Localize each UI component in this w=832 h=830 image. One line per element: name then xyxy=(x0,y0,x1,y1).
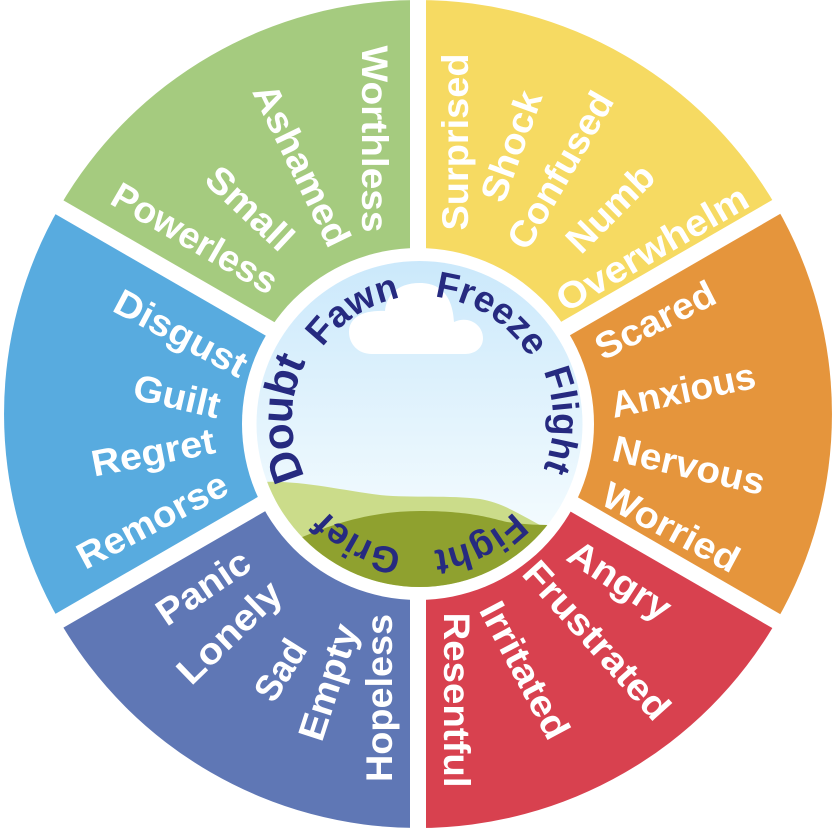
orange sector words: Anxious xyxy=(607,355,759,426)
center white ring xyxy=(242,248,594,600)
orange sector words: Worried xyxy=(595,474,747,581)
indigo sector words: Hopeless xyxy=(359,614,400,782)
sector: red xyxy=(418,414,776,828)
center scene: sky, cloud and hills xyxy=(250,255,590,600)
red sector words: Irritated xyxy=(471,594,578,746)
blue sector words: Regret xyxy=(88,420,218,484)
green sector words: Ashamed xyxy=(245,77,359,253)
center curved labels xyxy=(263,272,580,574)
green sector words: Small xyxy=(197,158,302,259)
indigo sector words: Panic xyxy=(148,541,258,634)
indigo sector words xyxy=(148,541,400,782)
green sector words: Worthless xyxy=(354,46,395,232)
yellow sector words: Shock xyxy=(472,85,550,207)
sector: blue xyxy=(4,207,418,621)
sector: indigo xyxy=(60,414,418,828)
red sector words: Resentful xyxy=(436,612,477,788)
label: Fight: Fight xyxy=(434,514,529,574)
cloud xyxy=(349,283,483,354)
blue sector words: Guilt xyxy=(129,367,224,426)
blue sector words: Remorse xyxy=(70,464,235,577)
indigo sector words: Lonely xyxy=(168,572,291,692)
red sector words xyxy=(436,532,680,788)
yellow sector words: Overwhelm xyxy=(549,177,756,320)
green sector words: Powerless xyxy=(104,174,285,302)
indigo sector words: Empty xyxy=(290,618,367,746)
label: Grief: Grief xyxy=(308,514,398,573)
orange sector words: Nervous xyxy=(609,428,769,503)
orange sector words xyxy=(588,273,769,581)
orange sector words: Scared xyxy=(588,273,722,368)
red sector words: Frustrated xyxy=(515,552,679,728)
light green hill xyxy=(267,482,546,587)
yellow sector words xyxy=(435,54,756,320)
red sector words: Angry xyxy=(560,532,680,629)
blue sector words xyxy=(70,281,254,577)
dark green hill xyxy=(302,511,548,587)
yellow sector words: Numb xyxy=(558,156,663,261)
green sector words xyxy=(104,46,395,302)
label: Freeze: Freeze xyxy=(436,272,542,354)
sector: green xyxy=(60,0,418,414)
yellow sector words: Confused xyxy=(499,84,622,256)
blue sector words: Disgust xyxy=(107,281,254,386)
yellow sector words: Surprised xyxy=(435,54,476,230)
label: Flight: Flight xyxy=(544,366,580,476)
label: Doubt: Doubt xyxy=(263,352,306,484)
label: Fawn: Fawn xyxy=(304,280,398,346)
sector: yellow xyxy=(418,0,776,414)
indigo sector words: Sad xyxy=(246,632,315,709)
sky xyxy=(256,261,582,525)
sector: orange xyxy=(418,207,832,621)
